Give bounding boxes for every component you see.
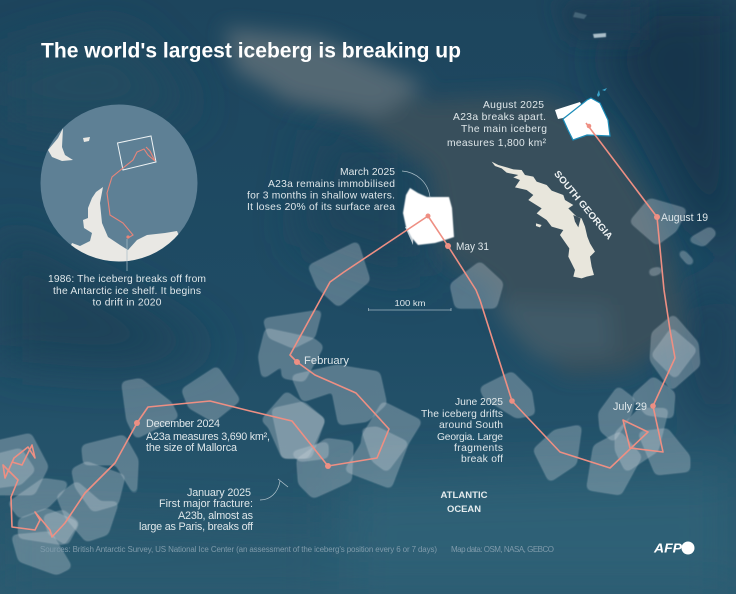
callout arrow January	[260, 479, 288, 500]
text: January 2025: January 2025	[187, 487, 251, 499]
iceberg position footprints: east cluster	[482, 317, 698, 493]
label: Atlantic Ocean	[440, 490, 488, 515]
text: June 2025: fragments	[454, 443, 503, 454]
inset drift route	[107, 147, 155, 238]
icon: Falkland Islands	[83, 137, 90, 142]
date labels: July 29	[613, 401, 647, 413]
text: August 2025	[447, 100, 547, 149]
sources: Sources: British Antarctic Survey, US National Ice Center (an assessment of the iceberg's position every 6 or 7 days)	[40, 545, 437, 554]
title: The world's largest iceberg is breaking up	[41, 38, 461, 62]
icon: South America tip	[48, 128, 73, 161]
AFP logo	[653, 540, 694, 556]
iceberg August 2025	[555, 88, 610, 140]
iceberg position footprints: near South Georgia	[452, 200, 715, 307]
text: March 2025: March 2025	[340, 167, 395, 178]
text: January 2025: First major fracture:	[159, 498, 253, 510]
callout arrow March	[402, 171, 430, 197]
text: August 2025: August 2025	[483, 100, 544, 111]
text: August 2025: A23a breaks apart.	[453, 112, 546, 123]
inset caption: 1986: The iceberg breaks off from	[48, 274, 206, 285]
South Georgia island	[492, 162, 595, 278]
inset caption: to drift in 2020	[92, 298, 162, 308]
scale bar: 100 km	[394, 298, 426, 308]
text: June 2025: break off	[461, 454, 503, 465]
text: January 2025: A23b, almost as	[178, 510, 254, 522]
text: December 2024: December 2024	[146, 418, 220, 430]
date labels	[304, 212, 708, 413]
text: June 2025: The iceberg drifts	[421, 409, 503, 420]
date labels: May 31	[456, 241, 489, 253]
label: South Georgia: SOUTH GEORGIA	[551, 169, 615, 242]
text: June 2025: around South	[439, 420, 503, 431]
label: Atlantic Ocean: OCEAN	[447, 504, 481, 515]
iceberg position footprints: west cluster	[0, 368, 238, 573]
text: March 2025: for 3 months in shallow waters.	[247, 190, 395, 202]
icon: Antarctic peninsula and ice shelf	[71, 187, 178, 262]
iceberg position footprints: central cluster	[260, 243, 420, 497]
AFP logo: AFP	[653, 540, 682, 556]
locator frame	[118, 136, 156, 170]
date labels: August 19	[661, 212, 708, 224]
scale bar	[368, 298, 451, 311]
text: August 2025: measures 1,800 km²	[447, 138, 547, 149]
inset source marker	[126, 235, 130, 239]
text: December 2024: A23a measures 3,690 km²,	[146, 431, 270, 443]
text: January 2025: large as Paris, breaks off	[139, 521, 254, 533]
drift route line	[3, 123, 675, 537]
text: March 2025	[247, 167, 395, 213]
text: March 2025: It loses 20% of its surface area	[247, 202, 395, 213]
inset caption	[48, 274, 206, 308]
text: June 2025: June 2025	[455, 397, 503, 408]
map credits: Map data: OSM, NASA, GEBCO	[451, 545, 554, 554]
text: January 2025	[139, 487, 254, 533]
inset caption: the Antarctic ice shelf. It begins	[53, 286, 201, 297]
text: December 2024: the size of Mallorca	[146, 442, 237, 454]
label: Atlantic Ocean: ATLANTIC	[440, 490, 488, 501]
text: June 2025	[421, 397, 503, 465]
text: August 2025: The main iceberg	[461, 124, 547, 135]
text: June 2025: Georgia. Large	[437, 432, 503, 443]
date labels: February	[304, 355, 349, 367]
iceberg March 2025	[402, 171, 454, 245]
text: March 2025: A23a remains immobilised	[268, 179, 395, 190]
inset globe locator	[40, 104, 198, 271]
text: December 2024	[146, 418, 270, 454]
date markers	[134, 124, 660, 469]
